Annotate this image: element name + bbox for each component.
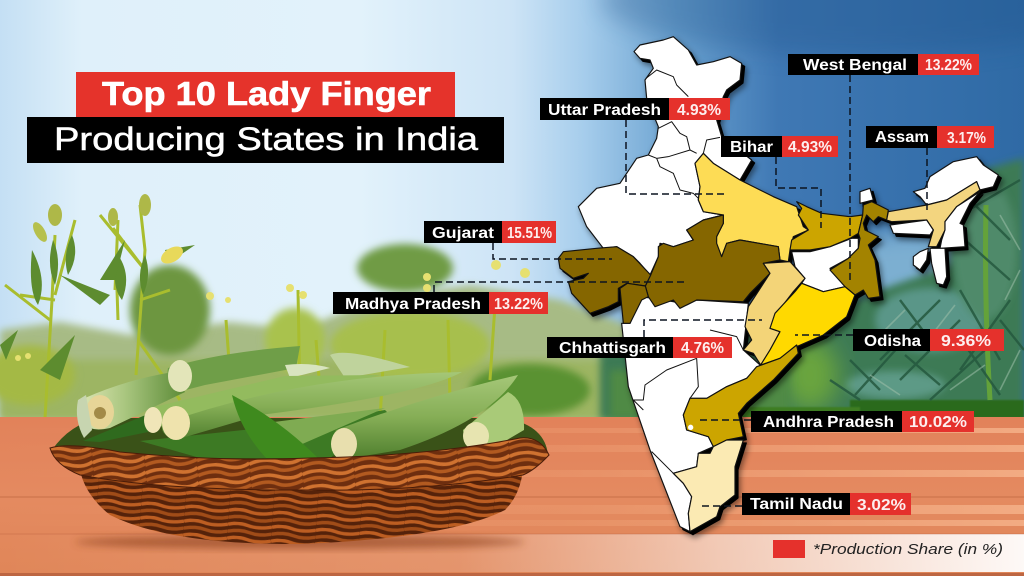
okra plants [5, 205, 495, 420]
label: Tamil Nadu: 3.02% [857, 497, 906, 514]
state: Madhya Pradesh [645, 215, 780, 308]
title [27, 72, 504, 163]
title line 1: Top 10 Lady Finger [102, 75, 431, 112]
label: Madhya Pradesh: 13.22% [494, 296, 543, 313]
state: West Bengal [830, 202, 888, 298]
state: Chhattisgarh [743, 262, 805, 365]
label: Assam: 3.17% [947, 130, 986, 147]
state: Uttar Pradesh [695, 153, 808, 262]
foliage right [600, 158, 1024, 420]
label: Madhya Pradesh [333, 292, 548, 314]
title line 1 [76, 72, 455, 117]
state: Bihar [790, 202, 863, 250]
north and west white states [578, 37, 752, 275]
background: foliage [0, 158, 1024, 420]
label: Gujarat: 15.51% [507, 225, 552, 242]
label: Andhra Pradesh: Andhra Pradesh [763, 414, 894, 431]
label: Chhattisgarh: 4.76% [681, 340, 724, 357]
label: Bihar [721, 136, 838, 157]
label: Uttar Pradesh: 4.93% [677, 102, 721, 119]
label: Chhattisgarh [547, 337, 732, 358]
label: Madhya Pradesh: Madhya Pradesh [345, 296, 481, 313]
states: Nagaland and Manipur [940, 192, 980, 248]
state: Mizoram [930, 248, 947, 285]
legend [773, 540, 1003, 558]
tree [357, 244, 453, 292]
state: Meghalaya [890, 220, 933, 235]
label: Bihar: Bihar [730, 139, 773, 156]
label: Odisha: 9.36% [941, 333, 991, 350]
label: Bihar: 4.93% [788, 139, 832, 156]
label: West Bengal: West Bengal [803, 57, 907, 74]
state: Arunachal Pradesh [913, 157, 998, 205]
label: Gujarat: Gujarat [432, 225, 494, 242]
state: Andhra Pradesh [683, 345, 798, 447]
label: Chhattisgarh: Chhattisgarh [559, 340, 666, 357]
table [0, 417, 1024, 576]
label: West Bengal: 13.22% [925, 57, 972, 74]
label: Assam: Assam [875, 129, 929, 146]
hedge left [0, 285, 640, 420]
lady fingers [77, 346, 524, 460]
leader lines [434, 75, 927, 506]
southern white states [622, 297, 760, 532]
title line 2: Producing States in India [54, 121, 478, 157]
label: Andhra Pradesh [751, 411, 974, 432]
Gujarat southern strip [620, 283, 648, 323]
label: Assam [866, 126, 994, 148]
state: Gujarat [558, 247, 651, 313]
state: Assam [887, 182, 980, 247]
label: Odisha [853, 329, 1004, 351]
state: Tripura [913, 248, 928, 270]
label: Andhra Pradesh: 10.02% [909, 414, 967, 431]
legend: *Production Share (in %) [813, 541, 1003, 558]
label: Uttar Pradesh: Uttar Pradesh [548, 102, 661, 119]
label: Tamil Nadu: Tamil Nadu [750, 496, 843, 513]
label: Odisha: Odisha [864, 333, 921, 350]
background: sky [0, 0, 1024, 420]
label: Tamil Nadu [742, 493, 911, 515]
internal borders: south [633, 330, 743, 473]
label: West Bengal [788, 54, 979, 75]
basket of lady fingers [50, 346, 549, 549]
state: Sikkim [860, 188, 873, 203]
basket rim [50, 438, 549, 490]
small enclave [688, 425, 693, 430]
label: Gujarat [424, 221, 556, 243]
label: Uttar Pradesh [540, 98, 730, 120]
state: Jharkhand [792, 238, 858, 292]
state: Tamil Nadu [673, 440, 743, 532]
state: Odisha [761, 283, 855, 365]
basket inside [52, 418, 548, 475]
title line 2 [27, 117, 504, 163]
internal borders: north [646, 70, 720, 198]
map of India [558, 37, 998, 532]
basket body [80, 470, 523, 544]
